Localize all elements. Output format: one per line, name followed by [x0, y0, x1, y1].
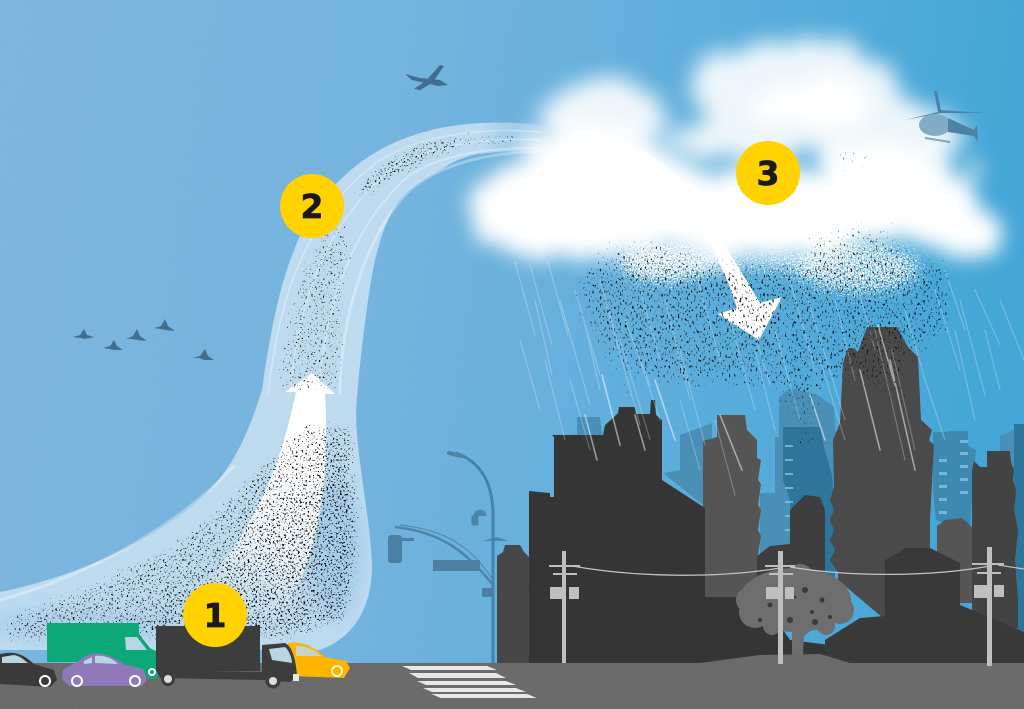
tall tower	[830, 327, 934, 618]
particles: falling rain zone	[569, 140, 960, 470]
white dissolving cloud base	[610, 236, 930, 300]
vehicle: purple car	[62, 654, 147, 687]
badge 3	[736, 141, 800, 205]
mid-grey buildings	[703, 415, 975, 603]
small centre dark building	[757, 495, 825, 600]
cloud	[470, 40, 1004, 261]
street light and traffic signal	[388, 453, 509, 663]
arrow: falling pollution	[560, 131, 782, 340]
arrow: rising pollution	[170, 373, 335, 630]
badge 2: 2	[301, 187, 323, 226]
right dark tower	[972, 451, 1018, 632]
tree	[736, 564, 854, 655]
foreground dark buildings	[825, 548, 1024, 663]
icon: helicopter	[905, 91, 985, 143]
particles: plume	[0, 130, 530, 645]
utility poles and wires	[549, 547, 1024, 666]
vehicle: black truck	[156, 626, 299, 688]
left small building	[497, 545, 530, 663]
crosswalk	[402, 666, 537, 698]
badge 3: 3	[757, 154, 779, 193]
badge 2	[280, 174, 344, 238]
vehicle: black car	[0, 653, 57, 687]
icons: flock of birds	[73, 319, 214, 360]
pollution plume	[0, 123, 550, 650]
back blue skyline	[560, 388, 1024, 640]
rain streaks	[515, 260, 1024, 495]
vehicle: green truck	[47, 623, 159, 679]
icon: airplane	[405, 65, 448, 90]
vehicle: yellow car	[288, 643, 350, 678]
badge 1	[183, 583, 247, 647]
main dark building	[529, 400, 830, 663]
badge 1: 1	[204, 596, 226, 635]
pollution particles	[0, 130, 960, 645]
ground road	[0, 654, 1024, 709]
